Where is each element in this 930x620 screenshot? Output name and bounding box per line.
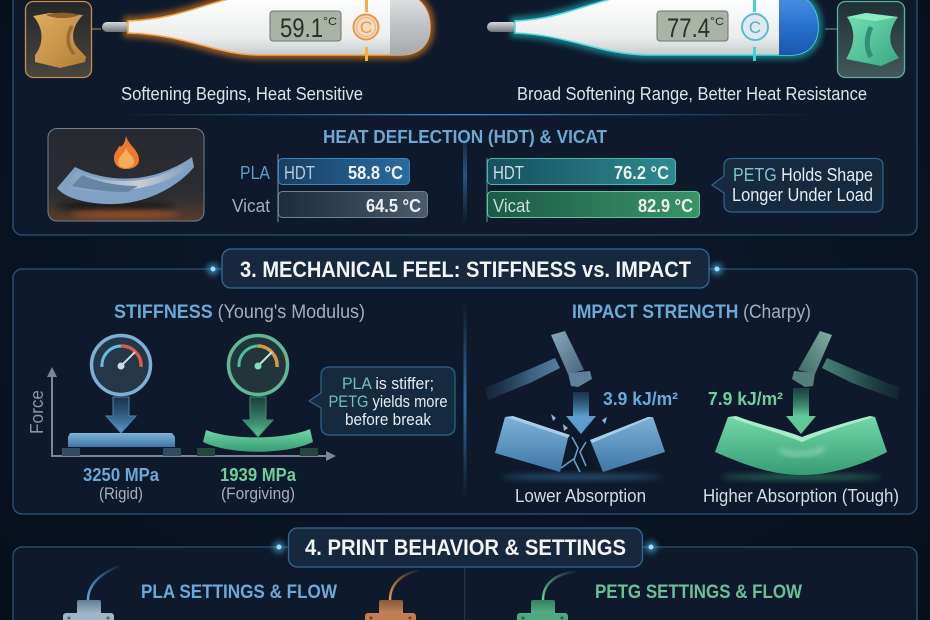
callout: PLA stiffer: before break: [345, 410, 431, 429]
PLA modulus value: 3250 MPa: [83, 465, 160, 485]
chart: PETG heat bars: [487, 158, 700, 222]
panel: mechanical feel: [13, 249, 917, 514]
chart: PETG heat bars: Vicat: [493, 196, 530, 216]
heading: stiffness: STIFFNESS (Young's Modulus): [114, 302, 365, 323]
arrow: PETG force: [243, 397, 273, 437]
axes: [47, 367, 336, 461]
callout: PLA stiffer: PLA is stiffer;: [342, 374, 434, 393]
heading: section 4: [273, 528, 657, 567]
callout: PLA stiffer: [309, 367, 455, 435]
chart: PLA heat bars: PLA: [240, 163, 270, 183]
heading: section 4: 4. PRINT BEHAVIOR & SETTINGS: [305, 535, 626, 560]
reading: 77.4: [667, 13, 710, 43]
PETG plate: [197, 429, 318, 456]
icon: PLA thermometer: °C: [323, 16, 337, 28]
icon: PLA thermometer: C: [360, 18, 372, 37]
panel: print behavior and settings: [13, 528, 917, 620]
chart: PETG heat bars: HDT: [493, 163, 524, 183]
callout: PLA stiffer: PETG yields more: [328, 392, 448, 411]
gauge: PETG: [228, 336, 288, 394]
icon: PLA softened cube: [26, 2, 101, 78]
icon: PETG softened cube: [825, 2, 904, 78]
icon: PLA nozzle: [63, 565, 122, 620]
PLA plate: [62, 433, 181, 456]
PETG modulus value: 1939 MPa: [220, 465, 297, 485]
gauge: PLA: [92, 336, 150, 394]
heading: PLA settings: PLA SETTINGS & FLOW: [141, 582, 337, 603]
caption: PLA softening: Softening Begins, Heat Sensitive: [121, 84, 363, 104]
icon: PETG nozzle: [517, 571, 578, 620]
caption: lower absorption: Lower Absorption: [515, 486, 646, 506]
icon: heat deflection specimen: [48, 128, 204, 221]
value: PETG impact: 7.9 kJ/m²: [708, 389, 783, 409]
chart: PLA heat bars: Vicat: [232, 196, 270, 216]
icon: PLA hammer and fractured bar: [485, 331, 665, 480]
caption: higher absorption: Higher Absorption (Tough): [703, 486, 899, 506]
caption: PETG softening: Broad Softening Range, Better Heat Resistance: [517, 84, 867, 104]
chart: PETG heat bars: 76.2 °C: [614, 163, 669, 183]
heading: heat deflection and vicat: HEAT DEFLECTION (HDT) & VICAT: [323, 126, 608, 147]
axis label: Force: [27, 390, 47, 434]
icon: PETG hammer and bent bar: [715, 331, 900, 480]
panel: thermal softening: [13, 0, 917, 235]
reading: 59.1: [280, 13, 323, 43]
arrow: PLA force: [106, 397, 136, 433]
value: PLA impact: 3.9 kJ/m²: [603, 389, 678, 409]
chart: PETG heat bars: 82.9 °C: [638, 196, 693, 216]
callout: PETG holds shape: PETG Holds Shape: [733, 165, 873, 185]
chart: PLA heat bars: 58.8 °C: [348, 163, 403, 183]
icon: PETG thermometer: [487, 0, 818, 61]
chart: stiffness diagram: (Rigid): [99, 484, 143, 503]
heading: PETG settings: PETG SETTINGS & FLOW: [595, 582, 802, 603]
heading: section 3: 3. MECHANICAL FEEL: STIFFNESS vs. IMPACT: [240, 257, 692, 282]
icon: PETG thermometer: °C: [710, 16, 724, 28]
chart: PLA heat bars: 64.5 °C: [366, 196, 421, 216]
icon: PETG thermometer: C: [749, 18, 761, 37]
heading: section 3: [207, 249, 723, 288]
chart: PLA heat bars: [232, 154, 428, 222]
callout: PETG holds shape: [712, 158, 883, 212]
chart: PLA heat bars: HDT: [284, 163, 315, 183]
chart: stiffness diagram: (Forgiving): [221, 484, 295, 503]
heading: impact strength: IMPACT STRENGTH (Charpy): [572, 302, 811, 323]
callout: PETG holds shape: Longer Under Load: [732, 185, 873, 205]
icon: orange nozzle: [365, 570, 420, 620]
chart: stiffness diagram: [27, 336, 336, 503]
icon: PLA thermometer: [102, 0, 430, 61]
